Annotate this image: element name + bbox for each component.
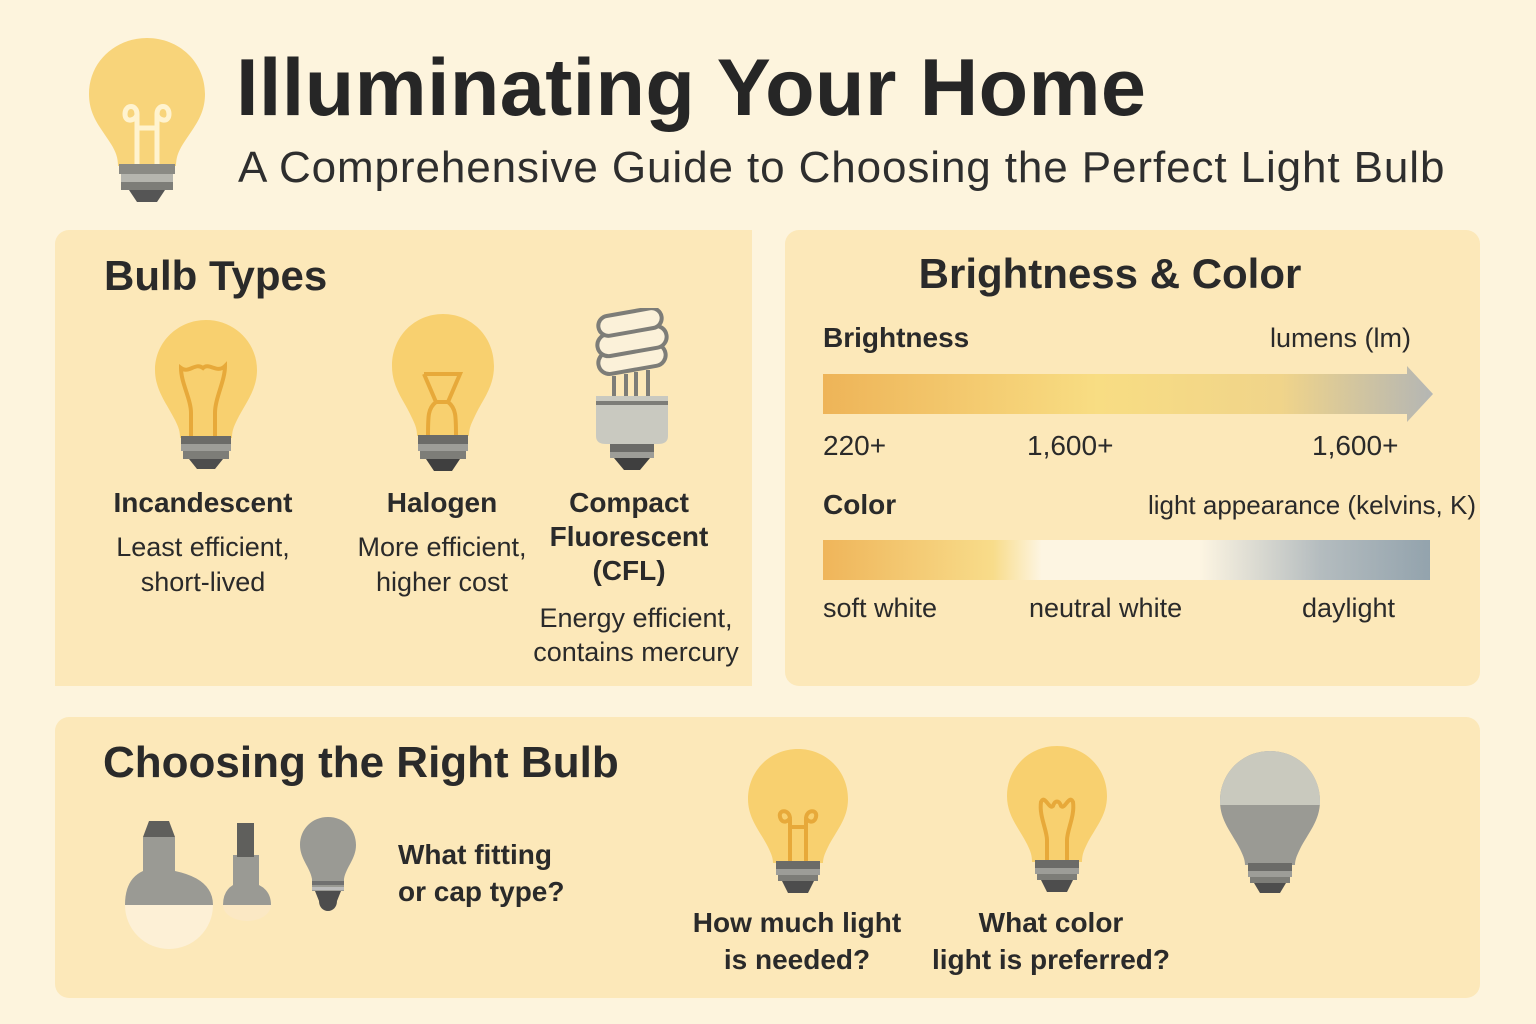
panel: choosing the right bulb (55, 717, 1480, 998)
heading: Choosing the Right Bulb (103, 738, 619, 787)
label: incandescent: Least efficient, (116, 532, 290, 562)
question: fitting (398, 839, 564, 907)
kelvin unit: light appearance (kelvins, K) (1148, 490, 1476, 520)
label: halogen: More efficient, (357, 532, 527, 562)
label: incandescent: short-lived (141, 567, 265, 597)
color labels: neutral white (1029, 593, 1182, 623)
icon: incandescent bulb (155, 320, 257, 469)
icon: fitting shapes (125, 817, 356, 949)
label: CFL: (CFL) (592, 555, 666, 586)
brightness values: 1,600+ (1027, 430, 1113, 461)
label: halogen (357, 487, 527, 597)
label: incandescent (114, 487, 292, 597)
label: CFL: Energy efficient, (539, 603, 733, 633)
brightness gradient arrow (823, 366, 1433, 422)
question: how much light: How much light (693, 907, 901, 938)
subtitle: A Comprehensive Guide to Choosing the Perfect Light Bulb (238, 143, 1445, 192)
heading: Brightness & Color (919, 250, 1301, 297)
header bulb icon (89, 38, 205, 202)
color label: Color (823, 489, 896, 520)
brightness values (823, 430, 1398, 461)
label: halogen: Halogen (387, 487, 497, 518)
label: CFL: contains mercury (533, 637, 739, 667)
question: fitting: What fitting (398, 839, 552, 870)
icon: bulb how much light (748, 749, 848, 893)
icon: halogen bulb (392, 314, 494, 471)
color labels: daylight (1302, 593, 1395, 623)
question: fitting: or cap type? (398, 876, 564, 907)
question: what color (932, 907, 1170, 975)
panel: bulb types (55, 230, 752, 686)
color labels: soft white (823, 593, 937, 623)
brightness label: Brightness (823, 322, 969, 353)
icon: bulb color (1007, 746, 1107, 892)
color labels (823, 593, 1395, 623)
question: how much light: is needed? (724, 944, 870, 975)
heading: Bulb Types (104, 252, 327, 299)
question: how much light (693, 907, 901, 975)
brightness values: 220+ (823, 430, 886, 461)
lumens unit: lumens (lm) (1270, 323, 1411, 353)
question: what color: What color (979, 907, 1123, 938)
brightness values: 1,600+ (1312, 430, 1398, 461)
label: incandescent: Incandescent (114, 487, 292, 518)
icon: gray bulb (1220, 751, 1320, 893)
label: CFL: Fluorescent (550, 521, 708, 552)
title: Illuminating Your Home (236, 43, 1146, 133)
color temperature bar (823, 540, 1430, 580)
label: CFL: Compact (569, 487, 689, 518)
panel: brightness & color (785, 230, 1480, 686)
question: what color: light is preferred? (932, 944, 1170, 975)
icon: CFL bulb (595, 308, 669, 470)
label: halogen: higher cost (376, 567, 508, 597)
label: CFL (533, 487, 739, 667)
